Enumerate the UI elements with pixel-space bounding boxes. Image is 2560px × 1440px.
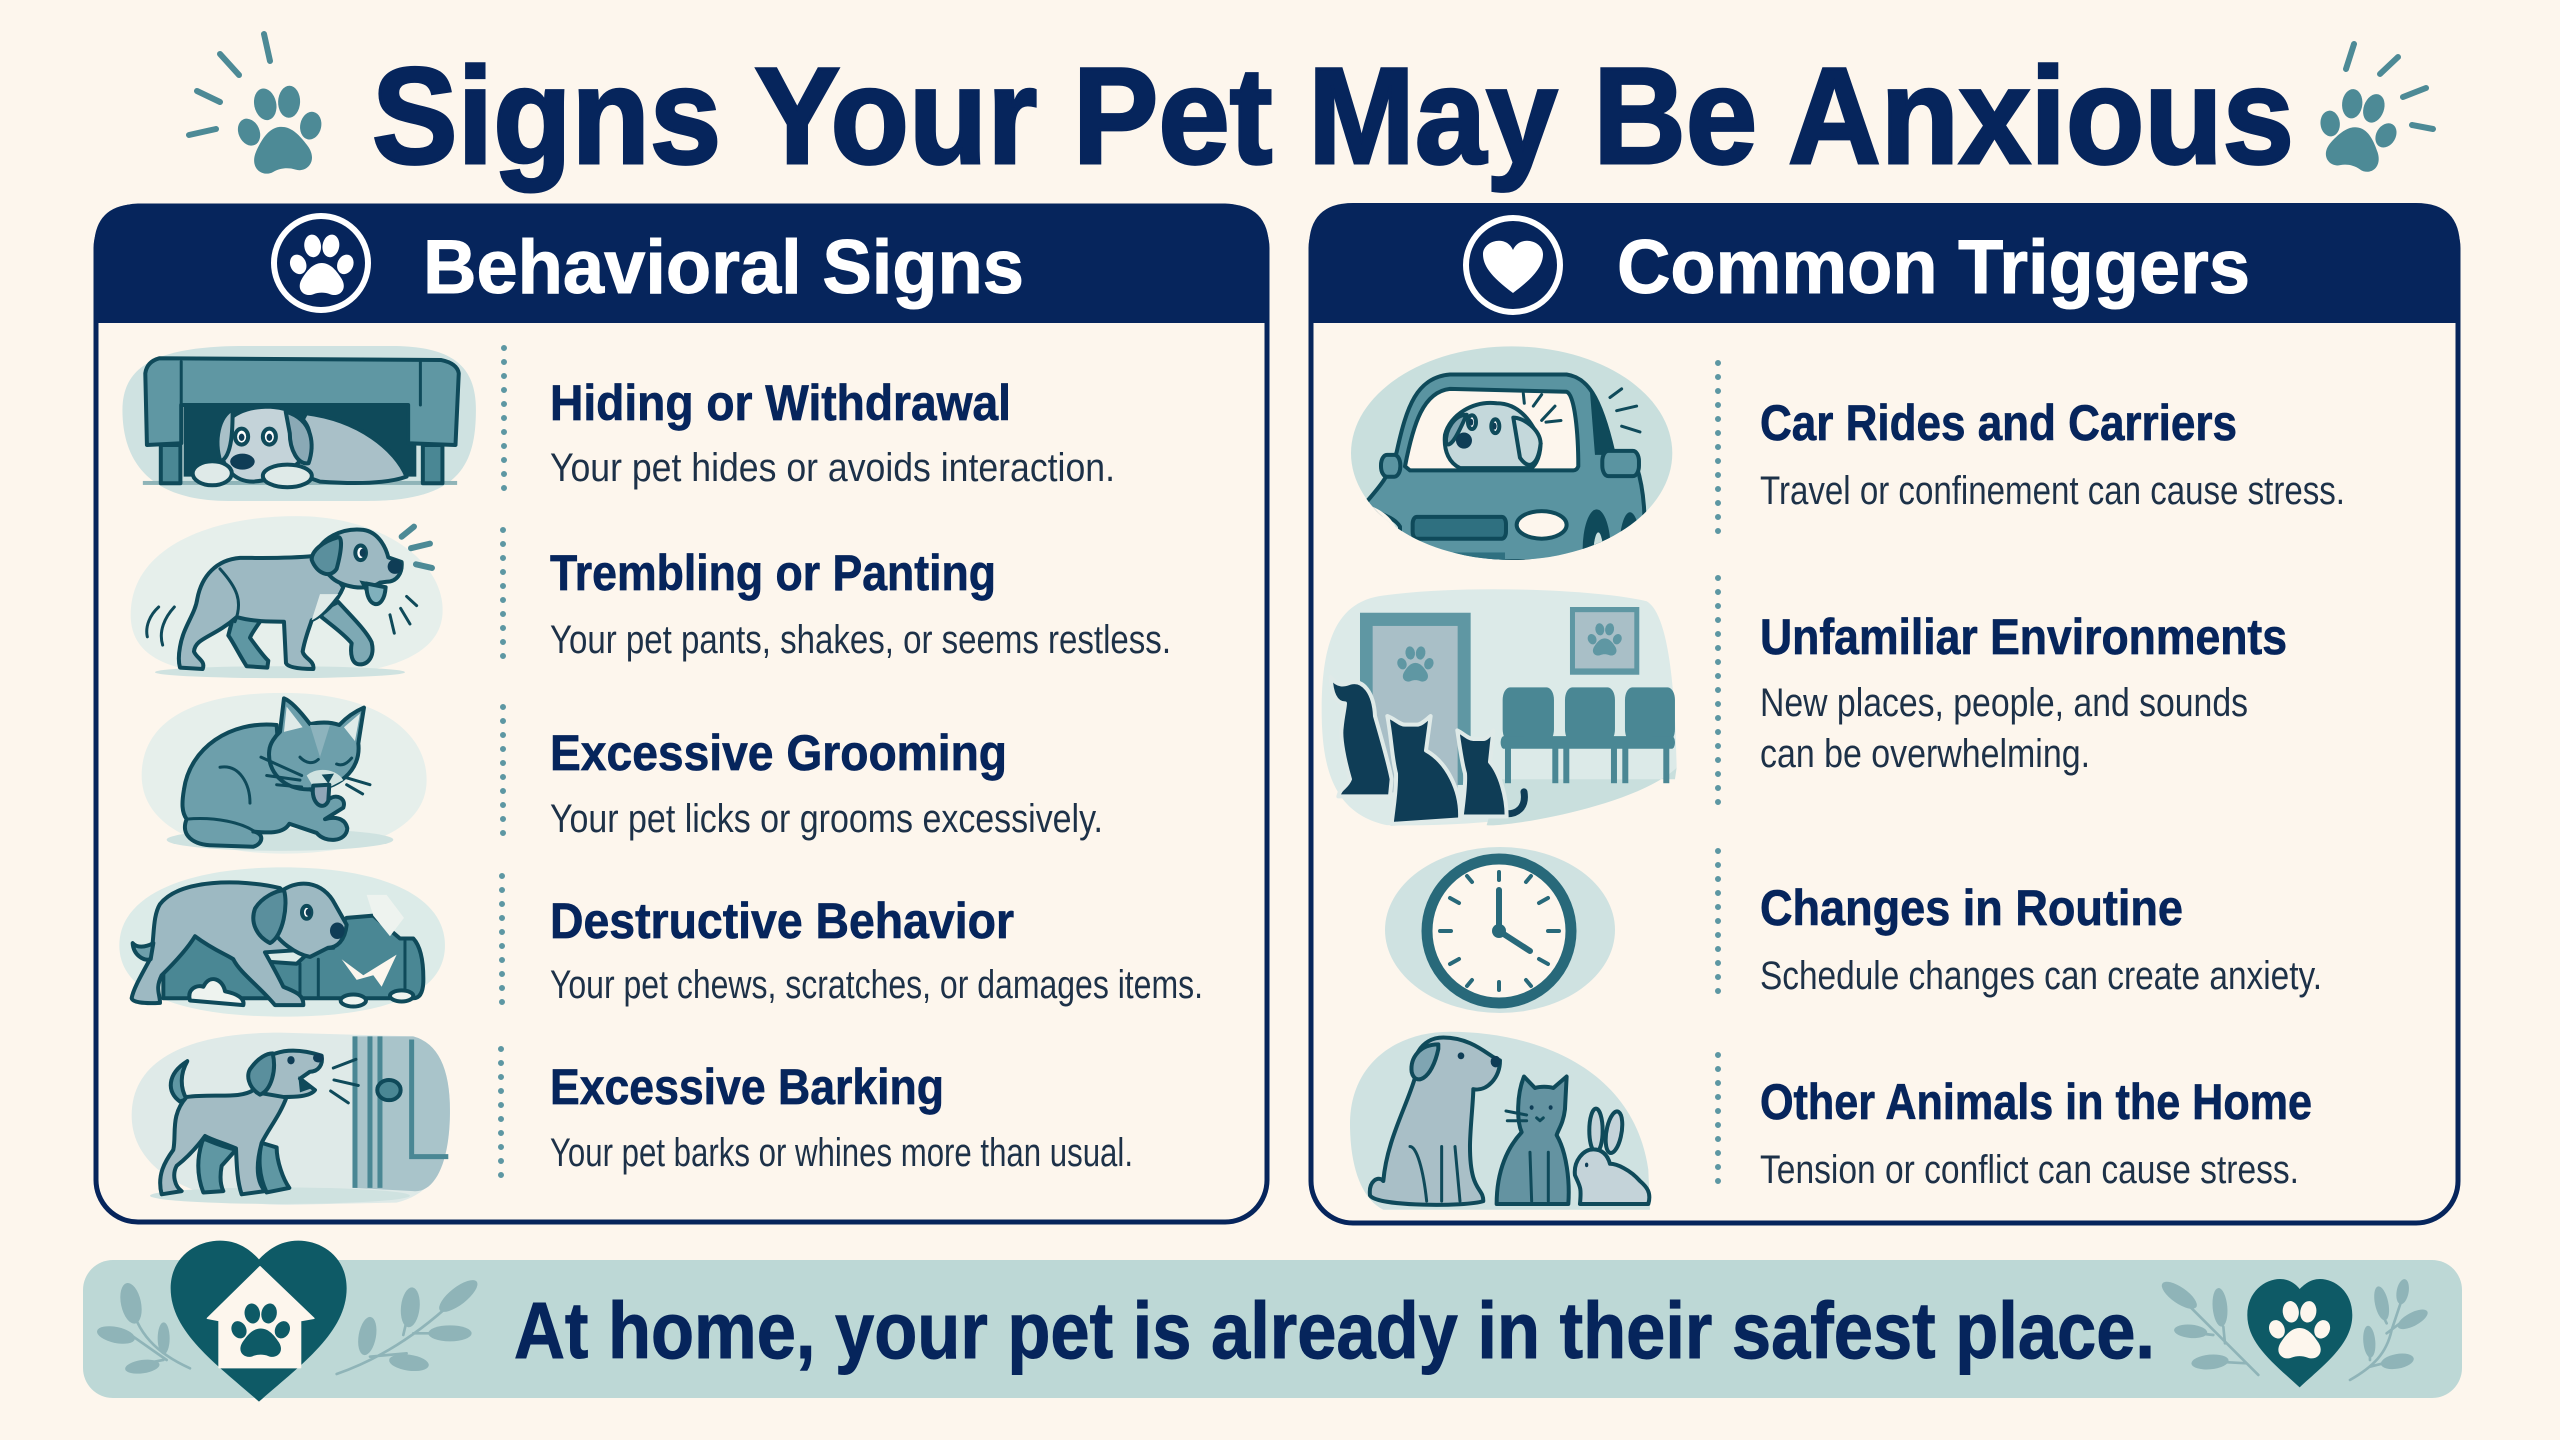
illustration: trembling panting dog xyxy=(131,516,443,678)
illustration: dog barking at door xyxy=(132,1033,450,1205)
item description: Your pet barks or whines more than usual. xyxy=(550,1131,1133,1175)
item: hiding or withdrawal xyxy=(550,375,1115,490)
item: destructive behavior xyxy=(550,893,1203,1007)
panel header: behavioral signs xyxy=(94,204,1269,323)
item: car rides and carriers xyxy=(1760,395,2345,513)
item: changes in routine xyxy=(1760,880,2322,998)
dotted divider row 1 xyxy=(501,348,507,493)
item description: Your pet licks or grooms excessively. xyxy=(550,797,1103,841)
banner text: At home, your pet is already in their safest place. xyxy=(514,1286,2155,1375)
illustration: grooming cat xyxy=(142,693,427,854)
item heading: Trembling or Panting xyxy=(550,545,996,601)
item: other animals in the home xyxy=(1760,1074,2312,1192)
item description: Your pet chews, scratches, or damages items. xyxy=(550,963,1203,1007)
illustration: vet waiting room xyxy=(1322,589,1677,825)
item heading: Unfamiliar Environments xyxy=(1760,609,2287,665)
panel: behavioral signs xyxy=(94,204,1269,1222)
icon: heart with paw xyxy=(2247,1279,2352,1387)
title: Signs Your Pet May Be Anxious xyxy=(372,40,2294,193)
item heading: Excessive Grooming xyxy=(550,725,1007,781)
illustration: dog in car xyxy=(1351,346,1672,560)
panel header: common triggers xyxy=(1309,203,2460,323)
item heading: Other Animals in the Home xyxy=(1760,1074,2312,1130)
dotted divider trigger 2 xyxy=(1715,578,1721,816)
dotted divider row 2 xyxy=(500,530,506,665)
illustration: dog, cat and rabbit xyxy=(1350,1032,1650,1210)
item description: Your pet pants, shakes, or seems restless. xyxy=(550,618,1171,662)
icon: heart in circle xyxy=(1466,218,1560,312)
item: excessive grooming xyxy=(550,725,1103,841)
dotted divider row 3 xyxy=(500,707,506,837)
icon: paw in circle xyxy=(274,216,368,310)
banner: safest place message xyxy=(83,1241,2462,1402)
item description: Tension or conflict can cause stress. xyxy=(1760,1148,2299,1192)
item description: Travel or confinement can cause stress. xyxy=(1760,469,2345,513)
item heading: Hiding or Withdrawal xyxy=(550,375,1011,431)
dotted divider trigger 1 xyxy=(1715,363,1721,544)
item heading: Changes in Routine xyxy=(1760,880,2183,936)
item: unfamiliar environments xyxy=(1760,609,2287,776)
illustration: wall clock xyxy=(1385,847,1615,1013)
icon: right title paw with rays xyxy=(2309,44,2433,177)
illustration: dog destroying cushion xyxy=(119,867,445,1017)
item description line 1: New places, people, and sounds xyxy=(1760,681,2248,725)
item: trembling or panting xyxy=(550,545,1171,662)
icon: heart with house and paw xyxy=(171,1241,347,1402)
item heading: Car Rides and Carriers xyxy=(1760,395,2237,451)
icon: left title paw with rays xyxy=(189,34,329,177)
item description: Your pet hides or avoids interaction. xyxy=(550,446,1115,490)
banner right leaves 1 xyxy=(2158,1277,2258,1375)
dotted divider trigger 4 xyxy=(1715,1055,1721,1193)
banner right leaves 2 xyxy=(2350,1278,2430,1380)
item: excessive barking xyxy=(550,1059,1133,1175)
item description line 2: can be overwhelming. xyxy=(1760,732,2090,776)
dotted divider row 4 xyxy=(499,876,505,1005)
item description: Schedule changes can create anxiety. xyxy=(1760,954,2322,998)
dotted divider trigger 3 xyxy=(1715,851,1721,997)
panel: common triggers xyxy=(1309,203,2460,1223)
banner left leaves 2 xyxy=(337,1275,482,1374)
heading: behavioral signs: Behavioral Signs xyxy=(423,225,1024,310)
heading: common triggers: Common Triggers xyxy=(1617,225,2250,310)
banner left leaves 1 xyxy=(95,1281,190,1376)
dotted divider row 5 xyxy=(498,1049,504,1186)
illustration: dog hiding under sofa xyxy=(122,346,476,501)
item heading: Excessive Barking xyxy=(550,1059,944,1115)
item heading: Destructive Behavior xyxy=(550,893,1014,949)
